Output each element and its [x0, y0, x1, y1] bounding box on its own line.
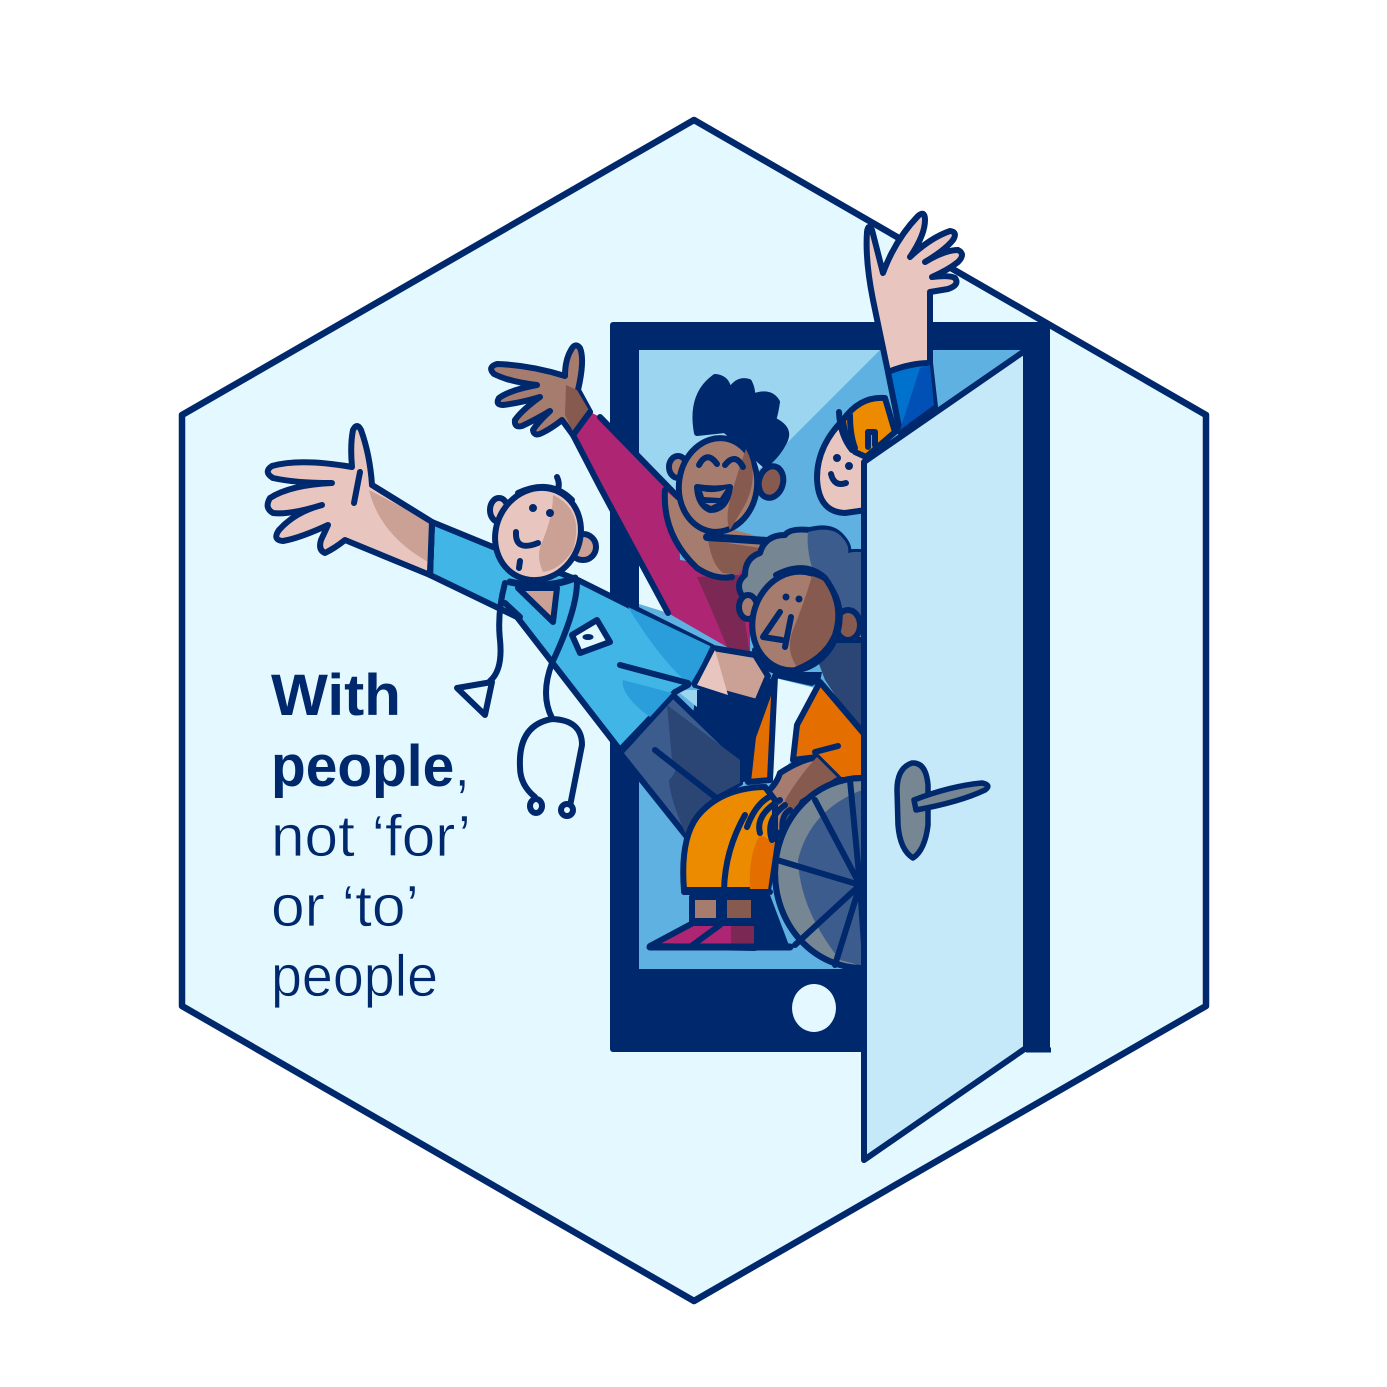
heading text: people, [271, 734, 470, 799]
ears [490, 498, 508, 522]
head [673, 433, 763, 537]
orange trousers [683, 787, 775, 890]
shoes [650, 923, 755, 948]
person: man in pink raising arm [491, 345, 787, 655]
person: nurse with stethoscope [268, 426, 775, 837]
heading text: people [271, 944, 438, 1009]
trousers [620, 695, 740, 837]
shirt [772, 678, 815, 782]
heading text [271, 663, 471, 1009]
door [864, 350, 1026, 1160]
left jacket panel [748, 676, 775, 782]
head [480, 474, 596, 594]
name badge [572, 620, 610, 653]
forearm and hand [768, 754, 840, 838]
hexagon panel [182, 120, 1206, 1301]
hair [695, 377, 786, 465]
heading text: With [271, 663, 401, 728]
stethoscope [457, 582, 582, 816]
scrubs torso [430, 522, 712, 750]
fingers [747, 797, 790, 840]
socks [692, 897, 719, 921]
arm and hand [268, 426, 432, 575]
wheelchair wheel [772, 775, 861, 969]
person: blonde person peeking [817, 398, 895, 513]
door handle [897, 763, 988, 858]
heading text: or ‘to’ [271, 874, 419, 939]
frame edge [1026, 1048, 1051, 1052]
hair [739, 528, 870, 640]
phone frame [610, 322, 1050, 1052]
head [749, 571, 843, 672]
back [819, 643, 861, 726]
hand [491, 345, 590, 435]
chest [665, 490, 770, 578]
neck shadow [772, 672, 822, 686]
neck [518, 588, 557, 622]
heading text: not ‘for’ [271, 804, 471, 869]
person: older woman in wheelchair [646, 525, 861, 969]
other arm [695, 648, 768, 702]
phone screen [639, 350, 1024, 969]
navy shade under arm [690, 678, 775, 782]
home button [792, 984, 836, 1032]
infographic [178, 116, 1210, 1304]
right jacket panel [793, 682, 865, 780]
ears [739, 595, 757, 619]
person: raised arm waving top right [867, 214, 962, 432]
